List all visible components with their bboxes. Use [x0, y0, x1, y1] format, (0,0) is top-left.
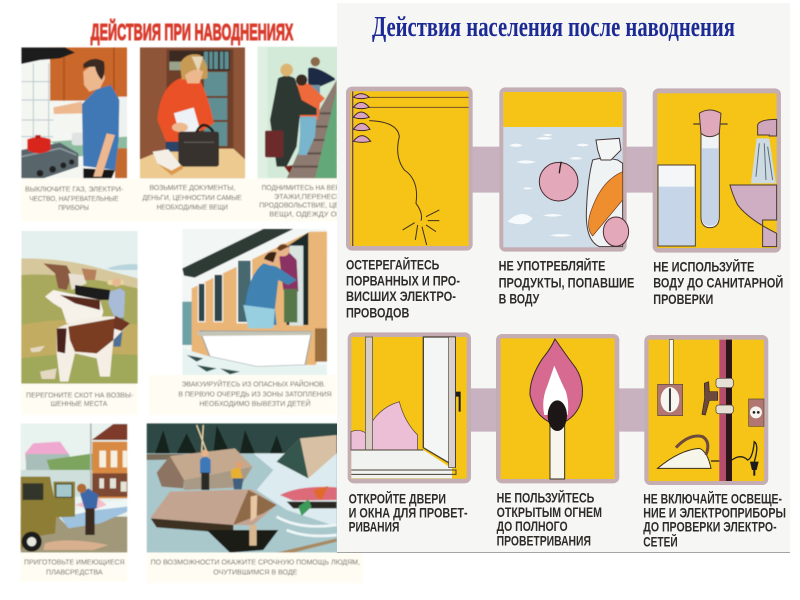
tile: contaminated water [653, 88, 781, 253]
illustration: prepare boats [21, 423, 127, 553]
caption: do not use water: ПРОВЕРКИ [653, 291, 713, 307]
caption: do not eat: НЕ УПОТРЕБЛЯЙТЕ [499, 257, 605, 274]
caption: do not use water [653, 258, 783, 307]
row 2 of left poster [21, 229, 337, 415]
caption: open doors: РИВАНИЯ [349, 519, 399, 535]
left poster: actions during flood [21, 19, 363, 583]
tile: no open fire [496, 334, 619, 483]
caption: no open fire: ДО ПОЛНОГО [497, 518, 568, 534]
right poster background [337, 3, 790, 553]
caption: beware of wires [346, 255, 460, 320]
caption: go upstairs: ПРОДОВОЛЬСТВИЕ, ЦЕННЫЕ [259, 203, 360, 210]
caption: prepare boats: ПРИГОТОВЬТЕ ИМЕЮЩИЕСЯ [24, 560, 125, 567]
caption: beware of wires: ПРОВОДОВ [346, 304, 409, 320]
illustration: family going upstairs [258, 47, 338, 178]
caption: turn off gas [25, 186, 124, 212]
caption: move cattle [26, 392, 134, 408]
caption: open doors: ОТКРОЙТЕ ДВЕРИ [349, 489, 446, 506]
caption: beware of wires: ВИСШИХ ЭЛЕКТРО- [346, 288, 456, 304]
tile: broken wires [346, 87, 473, 251]
caption: help people: ОЧУТИВШИМСЯ В ВОДЕ [213, 569, 298, 576]
caption: help people [151, 560, 360, 576]
caption: take documents: ВОЗЬМИТЕ ДОКУМЕНТЫ, [149, 185, 235, 192]
upper row of tiles [346, 87, 783, 320]
caption: no open fire: ПРОВЕТРИВАНИЯ [497, 533, 591, 549]
tile: spoiled food in water [499, 87, 629, 252]
caption: do not use water: НЕ ИСПОЛЬЗУЙТЕ [653, 258, 754, 275]
illustration: rescuing people on flooded roofs [147, 423, 338, 553]
caption: take documents: НЕОБХОДИМЫЕ ВЕЩИ [157, 204, 228, 211]
illustration: woman packing documents [140, 47, 245, 178]
right poster: actions after flood [337, 3, 790, 553]
caption: move cattle: ПЕРЕГОНИТЕ СКОТ НА ВОЗВЫ- [26, 392, 134, 399]
caption: evacuate: В ПЕРВУЮ ОЧЕРЕДЬ ИЗ ЗОНЫ ЗАТОПЛЕНИЯ [178, 391, 332, 398]
caption: help people: ПО ВОЗМОЖНОСТИ ОКАЖИТЕ СРОЧНУЮ ПОМОЩЬ ЛЮДЯМ, [151, 560, 360, 567]
caption: go upstairs: ПОДНИМИТЕСЬ НА ВЕРХНИЕ [262, 185, 359, 192]
caption: prepare boats: ПЛАВСРЕДСТВА [46, 569, 103, 576]
caption: open doors: И ОКНА ДЛЯ ПРОВЕТ- [349, 504, 468, 520]
caption: do not eat: ПРОДУКТЫ, ПОПАВШИЕ [499, 274, 634, 290]
caption: go upstairs: ЭТАЖИ,ПЕРЕНЕСИТЕ [274, 194, 351, 201]
illustration: man turning off gas [21, 47, 127, 178]
caption: do not eat: В ВОДУ [499, 290, 540, 306]
caption: take documents: ДЕНЬГИ, ЦЕННОСТИИ САМЫЕ [142, 195, 242, 202]
caption: prepare boats [24, 560, 125, 576]
caption backgrounds row 3 [21, 553, 363, 583]
tile: no electricity [644, 335, 768, 485]
caption: go upstairs [259, 185, 360, 219]
caption: do not switch on lights [643, 489, 786, 550]
caption: beware of wires: ПОРВАННЫХ И ПРО- [346, 272, 460, 288]
caption: no open fire: НЕ ПОЛЬЗУЙТЕСЬ [497, 489, 594, 506]
caption: move cattle: ШЕННЫЕ МЕСТА [51, 401, 108, 408]
caption backgrounds row 2 [21, 375, 337, 415]
caption: evacuate: НЕОБХОДИМО ВЫВЕЗТИ ДЕТЕЙ [199, 399, 311, 408]
caption: evacuate: ЭВАКУИРУЙТЕСЬ ИЗ ОПАСНЫХ РАЙОНОВ. [182, 380, 326, 389]
caption: take documents [142, 185, 242, 211]
illustration: moving cattle to high ground [21, 231, 138, 384]
row 1 of left poster [21, 47, 360, 222]
connector bands upper [471, 147, 654, 193]
bottom border [337, 552, 790, 553]
caption: go upstairs: ВЕЩИ, ОДЕЖДУ ОБУВЬ [269, 212, 356, 219]
caption backgrounds row 1 [21, 178, 341, 222]
caption: no open fire: ОТКРЫТЫМ ОГНЕМ [497, 504, 602, 520]
lower row of tiles [348, 332, 786, 550]
caption: do not switch on lights: СЕТЕЙ [643, 533, 678, 550]
caption: no open fire [497, 489, 602, 549]
caption: turn off gas: ЧЕСТВО, НАГРЕВАТЕЛЬНЫЕ [29, 196, 119, 203]
connector bands lower [469, 388, 646, 432]
caption: turn off gas: ПРИБОРЫ [58, 205, 89, 212]
illustration: evacuation by boat [182, 229, 327, 375]
caption: beware of wires: ОСТЕРЕГАЙТЕСЬ [346, 255, 439, 272]
caption: evacuate [178, 380, 332, 408]
caption: do not eat [499, 257, 634, 306]
caption: open doors [349, 489, 468, 535]
tile: open windows [348, 332, 471, 483]
left heading: ДЕЙСТВИЯ ПРИ НАВОДНЕНИЯХ [91, 19, 293, 45]
caption: turn off gas: ВЫКЛЮЧИТЕ ГАЗ, ЭЛЕКТРИ- [25, 186, 124, 193]
row 3 of left poster [21, 423, 363, 583]
